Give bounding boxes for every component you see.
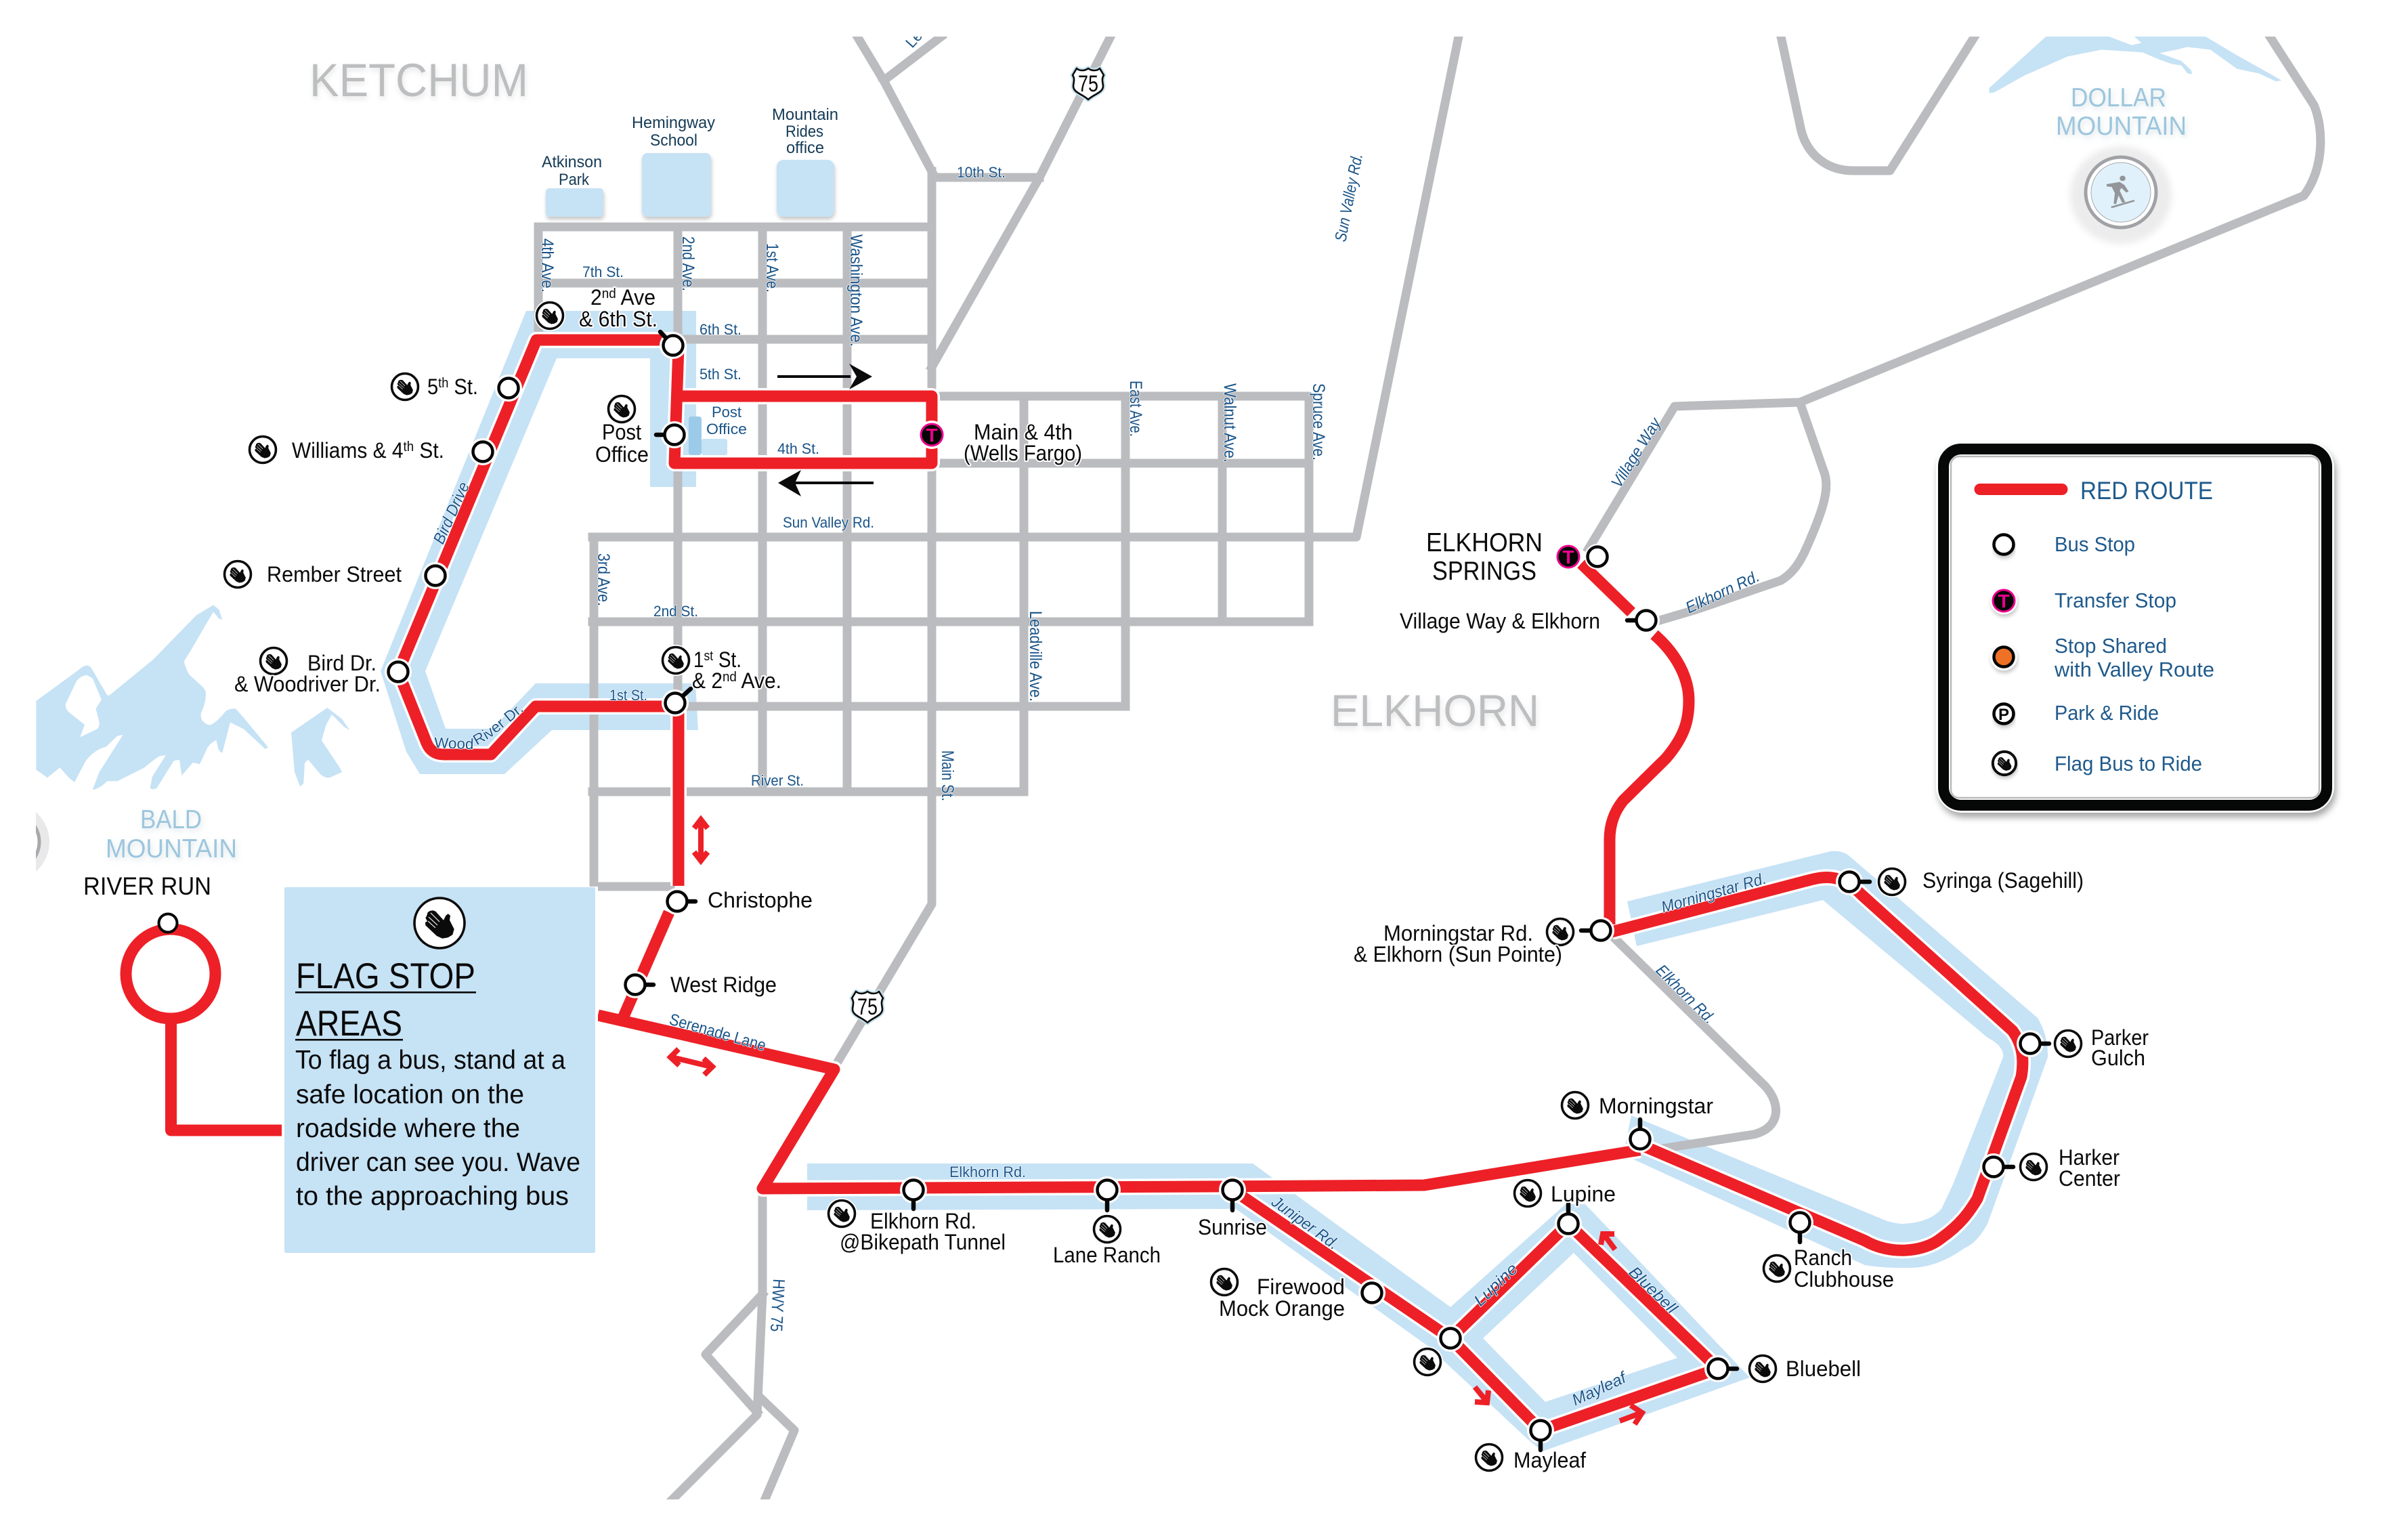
US 75 shield south <box>852 991 883 1023</box>
heading: Dollar Mountain: DOLLAR <box>2071 83 2166 112</box>
label: 1st St and 2nd Ave: Ave. <box>737 668 781 693</box>
street: Leadville Ave: Leadville Ave. <box>1026 611 1045 702</box>
street: Spruce Ave: Spruce Ave. <box>1309 383 1328 461</box>
heading: Elkhorn: ELKHORN <box>1331 685 1539 735</box>
label: 1st St and 2nd Ave: st <box>704 649 713 664</box>
flag icon: 5th St <box>389 371 421 402</box>
street: 6th St: 6th St. <box>700 321 741 338</box>
mountain shape: Dollar Mountain <box>1989 37 2281 93</box>
band: Ketchum flag stop area <box>381 311 698 774</box>
label: 5th St: th <box>438 376 448 391</box>
legend: flag bus <box>1993 752 2202 775</box>
flag icon: Harker <box>2018 1151 2049 1182</box>
label: Elkhorn Rd Bikepath Tunnel: @Bikepath Tunnel <box>840 1230 1006 1254</box>
label: Christophe: Christophe <box>708 888 813 912</box>
text block: flag instructions: driver can see you. Wave <box>296 1148 580 1177</box>
transit stops <box>385 332 2049 1450</box>
flag icon: 2nd Ave <box>534 300 565 331</box>
street: Village Way: Village Way <box>1608 414 1666 491</box>
flag icon: 1st St <box>660 645 691 676</box>
flag icon: Post Office <box>606 393 637 425</box>
legend: flag bus: Flag Bus to Ride <box>2055 752 2202 775</box>
transfer stop: Main and 4th <box>918 421 946 449</box>
label: Post Office: Post <box>602 420 641 444</box>
band: Elkhorn Rd and Juniper loop <box>807 1164 1750 1451</box>
landmark: Hemingway School <box>632 114 715 150</box>
stop: Christophe <box>664 888 695 915</box>
Bald Mountain ski icon, clipped <box>36 813 49 871</box>
label: Post Office <box>595 420 649 467</box>
label: Firewood Mock Orange: Firewood <box>1257 1275 1345 1299</box>
label: Bird Dr and Woodriver Dr: & Woodriver Dr. <box>234 672 381 696</box>
heading: flag stop areas: AREAS <box>296 1004 402 1044</box>
text block: flag instructions <box>295 1046 580 1211</box>
legend: transfer stop <box>1990 587 2176 614</box>
label: 5th St: St. <box>448 375 478 399</box>
stop: Bird Dr <box>385 658 412 685</box>
label: Main and 4th Wells Fargo <box>964 420 1082 465</box>
label: Ranch Clubhouse: Ranch <box>1794 1245 1852 1270</box>
stop: West Ridge <box>622 971 653 998</box>
label: Ranch Clubhouse: Clubhouse <box>1794 1267 1894 1292</box>
stop: Lane Ranch <box>1094 1176 1121 1210</box>
stop: 1st St and 2nd Ave <box>662 689 691 717</box>
stop: Firewood <box>1358 1279 1385 1306</box>
River Run loop <box>126 914 282 1130</box>
label: Rember Street: Rember Street <box>267 562 402 586</box>
landmark: Hemingway School: Hemingway <box>632 114 715 132</box>
street: Elkhorn Rd horizontal: Elkhorn Rd. <box>949 1164 1026 1180</box>
label: Parker Gulch <box>2091 1025 2149 1070</box>
label: Main and 4th Wells Fargo: Main & 4th <box>974 420 1073 444</box>
street: Sun Valley Rd horizontal: Sun Valley Rd. <box>783 514 874 531</box>
flag icon: Juniper <box>1412 1346 1443 1378</box>
label: Morningstar Rd and Elkhorn: & Elkhorn (Sun Pointe) <box>1354 942 1562 966</box>
label: 2nd Ave and 6th St: & 6th St. <box>579 307 658 331</box>
post office building <box>689 417 727 455</box>
parks and buildings <box>546 153 834 217</box>
street: Morningstar Rd: Morningstar Rd. <box>1659 870 1768 917</box>
landmark: Atkinson Park <box>542 153 602 189</box>
label: Morningstar Rd and Elkhorn <box>1354 921 1562 966</box>
text block: flag instructions: roadside where the <box>296 1114 520 1143</box>
legend: stop shared: with Valley Route <box>2054 658 2214 681</box>
label: Elkhorn Rd Bikepath Tunnel: Elkhorn Rd. <box>870 1209 976 1233</box>
landmark: Atkinson Park: Atkinson <box>542 153 602 171</box>
label: Lupine: Lupine <box>1551 1182 1616 1206</box>
stop: Elkhorn Rd Bikepath Tunnel <box>900 1176 927 1209</box>
street: Elkhorn Rd diagonal: Elkhorn Rd. <box>1652 961 1719 1027</box>
label: Firewood Mock Orange <box>1219 1275 1345 1321</box>
label: 1st St and 2nd Ave: nd <box>723 670 737 685</box>
label: Main and 4th Wells Fargo: (Wells Fargo) <box>964 441 1082 465</box>
label: Williams and 4th St: St. <box>414 438 444 463</box>
label: Parker Gulch: Gulch <box>2091 1046 2145 1070</box>
street: HWY 75: HWY 75 <box>767 1279 788 1332</box>
red one-way arrow Juniper south <box>1475 1387 1488 1403</box>
red one-way arrow Mayleaf <box>1620 1405 1642 1424</box>
legend: bus stop <box>1994 532 2135 556</box>
heading: Bald Mountain: BALD <box>140 805 202 834</box>
flag icon: Syringa <box>1876 866 1908 897</box>
label: Bird Dr and Woodriver Dr <box>234 651 381 696</box>
street: 4th Ave: 4th Ave. <box>538 238 557 293</box>
stop: Sunrise <box>1219 1176 1246 1210</box>
flag icon: Ranch <box>1761 1253 1792 1284</box>
landmark: Post Office building <box>706 404 747 438</box>
stop: 2nd Ave and 6th St <box>660 332 687 359</box>
stop: Williams and 4th <box>469 438 496 465</box>
label: Syringa: Syringa (Sagehill) <box>1922 868 2084 893</box>
flag icon: Elkhorn Rd <box>826 1198 857 1229</box>
label: Parker Gulch: Parker <box>2091 1025 2149 1050</box>
landmark: Mountain Rides office: office <box>786 139 824 157</box>
flag stop icons <box>222 300 2084 1473</box>
label: Bluebell: Bluebell <box>1786 1357 1861 1381</box>
street: 2nd Ave: 2nd Ave. <box>679 236 697 291</box>
stop: Rember Street <box>422 562 449 589</box>
heading: Ketchum: KETCHUM <box>309 54 528 106</box>
label: West Ridge: West Ridge <box>670 973 777 997</box>
stop labels <box>83 285 2149 1472</box>
heading: Dollar Mountain: MOUNTAIN <box>2056 112 2187 141</box>
flag icon: Firewood <box>1209 1266 1240 1298</box>
label: Mayleaf: Mayleaf <box>1513 1448 1586 1472</box>
roads <box>538 37 2321 1507</box>
red one-way arrow Bluebell <box>1601 1234 1615 1250</box>
street: Juniper Rd: Juniper Rd. <box>1268 1192 1342 1254</box>
street: 3rd Ave: 3rd Ave. <box>594 553 613 606</box>
label: 2nd Ave and 6th St: Ave <box>616 285 655 310</box>
stop: Parker Gulch <box>2017 1030 2049 1057</box>
street: Bluebell: Bluebell <box>1625 1263 1681 1318</box>
stop: 5th St <box>495 375 522 402</box>
stop: Lupine <box>1555 1204 1582 1237</box>
text block: flag instructions: to the approaching bus <box>296 1182 569 1211</box>
label: Firewood Mock Orange: Mock Orange <box>1219 1296 1345 1321</box>
black direction arrow east <box>777 364 872 389</box>
landmark: Mountain Rides office <box>772 106 838 157</box>
label: 2nd Ave and 6th St: nd <box>602 286 616 301</box>
legend: park and ride <box>1994 701 2159 725</box>
US 75 shield south: 75 <box>857 994 878 1020</box>
street: Elkhorn Rd upper: Elkhorn Rd. <box>1683 568 1763 617</box>
icon: flag hand <box>414 898 465 948</box>
street: East Ave: East Ave. <box>1126 381 1145 437</box>
legend: transfer stop: T <box>1998 591 2010 612</box>
label: Elkhorn Rd Bikepath Tunnel <box>840 1209 1006 1254</box>
street: 5th St: 5th St. <box>700 366 741 383</box>
flag icon: Lane Ranch <box>1092 1214 1123 1245</box>
landmark: Mountain Rides office: Mountain <box>772 106 838 124</box>
Dollar Mountain ski icon <box>2070 146 2172 244</box>
label: Lane Ranch: Lane Ranch <box>1053 1243 1161 1267</box>
label: 1st St and 2nd Ave <box>692 647 781 693</box>
stop: Morningstar <box>1627 1119 1654 1153</box>
street: 1st St: 1st St. <box>609 687 647 704</box>
stop: Morningstar Rd and Elkhorn <box>1581 917 1614 944</box>
street: 1st Ave: 1st Ave. <box>762 243 781 293</box>
street: Lupine: Lupine <box>1470 1260 1522 1310</box>
label: Post Office: Office <box>595 442 649 467</box>
street: Serenade Lane: Serenade Lane <box>667 1010 768 1055</box>
street: Walnut Ave: Walnut Ave. <box>1220 383 1239 463</box>
label: 1st St and 2nd Ave: 1 <box>693 647 706 672</box>
red two-way arrow Serenade <box>670 1049 712 1075</box>
label: Williams and 4th St: Williams & 4 <box>292 438 411 463</box>
red route line <box>398 340 2023 1430</box>
street: River St: River St. <box>751 772 804 789</box>
label: Village Way and Elkhorn: Village Way & Elkhorn <box>1400 609 1600 633</box>
legend: stop shared <box>1990 634 2214 681</box>
label: Elkhorn Springs: SPRINGS <box>1432 557 1536 586</box>
label: Elkhorn Springs: ELKHORN <box>1426 528 1543 557</box>
service area bands <box>381 311 2048 1451</box>
legend: red route: RED ROUTE <box>2080 477 2213 505</box>
flag icon: Morningstar Rd <box>1545 916 1576 947</box>
heading: Bald Mountain: MOUNTAIN <box>106 834 237 863</box>
heading: Bald Mountain <box>106 805 237 863</box>
flag icon: Williams <box>247 434 278 465</box>
label: Harker Center: Harker <box>2059 1145 2120 1170</box>
street: Wood River Dr: Wood River Dr. <box>433 706 524 750</box>
mountain shape: Bald Mountain <box>36 605 350 790</box>
Mountain Rides office area <box>777 160 834 217</box>
red route casing <box>398 340 2023 1430</box>
label: Sunrise: Sunrise <box>1198 1215 1267 1239</box>
street: clipped road name at top: Le <box>902 27 926 51</box>
landmark: Atkinson Park: Park <box>559 171 590 189</box>
street: 10th St: 10th St. <box>957 164 1006 181</box>
label: Morningstar Rd and Elkhorn: Morningstar Rd. <box>1383 921 1533 945</box>
flag icon: Morningstar <box>1560 1090 1591 1121</box>
label: 2nd Ave and 6th St <box>579 285 658 331</box>
legend: park and ride: Park & Ride <box>2055 701 2159 725</box>
flag icon: Rember <box>222 559 253 590</box>
label: 2nd Ave and 6th St: 2 <box>590 285 603 310</box>
street: Washington Ave: Washington Ave. <box>846 234 865 347</box>
street: Mayleaf: Mayleaf <box>1569 1368 1631 1409</box>
label: Williams and 4th St: th <box>404 440 414 454</box>
stop: Juniper junction <box>1437 1325 1464 1352</box>
heading: flag stop areas <box>295 956 476 1044</box>
landmark: Mountain Rides office: Rides <box>786 123 823 141</box>
red two-way arrow vertical <box>694 819 708 861</box>
legend: transfer stop: Transfer Stop <box>2055 589 2176 612</box>
transfer stop: Elkhorn Springs: T <box>1562 547 1574 568</box>
area names <box>106 54 2187 863</box>
stop: Elkhorn Springs <box>1585 544 1610 570</box>
transfer stop: Main and 4th: T <box>926 425 938 446</box>
Hemingway School area <box>642 153 711 217</box>
flag icon: Lupine <box>1512 1178 1543 1209</box>
stop: Harker Center <box>1980 1153 2013 1180</box>
label: Elkhorn Springs <box>1426 528 1543 586</box>
street: 4th St: 4th St. <box>777 440 819 457</box>
heading: flag stop areas: FLAG STOP <box>296 956 475 996</box>
street: 7th St: 7th St. <box>582 263 624 280</box>
flag icon: Parker <box>2052 1028 2084 1059</box>
text block: flag instructions: safe location on the <box>296 1080 524 1109</box>
stop: Village Way and Elkhorn <box>1627 607 1660 634</box>
landmark: Post Office building: Post <box>712 404 741 421</box>
landmark: Hemingway School: School <box>650 131 697 150</box>
street labels <box>422 37 1766 1406</box>
landmark: Post Office building: Office <box>706 421 747 438</box>
flag icon: Bird Dr <box>258 645 289 677</box>
flag icon: Mayleaf <box>1474 1442 1505 1473</box>
label: River Run: RIVER RUN <box>83 872 211 900</box>
black direction arrow west <box>778 470 874 496</box>
label: Bird Dr and Woodriver Dr: Bird Dr. <box>307 651 377 675</box>
label: Morningstar: Morningstar <box>1599 1094 1713 1118</box>
street: Bird Drive: Bird Drive <box>430 479 473 547</box>
panel: flag stop areas <box>284 887 598 1254</box>
Atkinson Park area <box>546 188 603 217</box>
label: 1st St and 2nd Ave: & 2 <box>692 668 725 693</box>
band: Morningstar loop <box>1623 851 2048 1268</box>
panel: legend <box>1943 449 2327 805</box>
stop: Ranch Clubhouse <box>1786 1209 1813 1242</box>
flag icon: Bluebell <box>1747 1353 1778 1384</box>
transfer stop: Elkhorn Springs <box>1554 542 1583 571</box>
label: Ranch Clubhouse <box>1794 1245 1894 1292</box>
stop: Bluebell <box>1704 1355 1737 1382</box>
label: 1st St and 2nd Ave: St. <box>713 647 741 672</box>
US 75 shield north: 75 <box>1078 71 1098 97</box>
label: Harker Center: Center <box>2059 1166 2120 1191</box>
US 75 shield north <box>1073 68 1104 100</box>
legend: park and ride: P <box>1998 706 2009 724</box>
legend: bus stop: Bus Stop <box>2055 532 2135 556</box>
street: Sun Valley Rd diagonal: Sun Valley Rd. <box>1331 152 1367 243</box>
stop: Mayleaf <box>1527 1417 1554 1450</box>
label: 5th St: 5 <box>427 375 439 399</box>
heading: Dollar Mountain <box>2056 83 2187 141</box>
street: Main St: Main St. <box>938 750 957 801</box>
label: Harker Center <box>2059 1145 2120 1191</box>
text block: flag instructions: To flag a bus, stand at a <box>295 1046 565 1075</box>
street: 2nd St: 2nd St. <box>653 603 698 620</box>
stop: Post Office <box>656 421 688 448</box>
legend: stop shared: Stop Shared <box>2055 634 2167 658</box>
stop: Syringa <box>1836 868 1870 895</box>
